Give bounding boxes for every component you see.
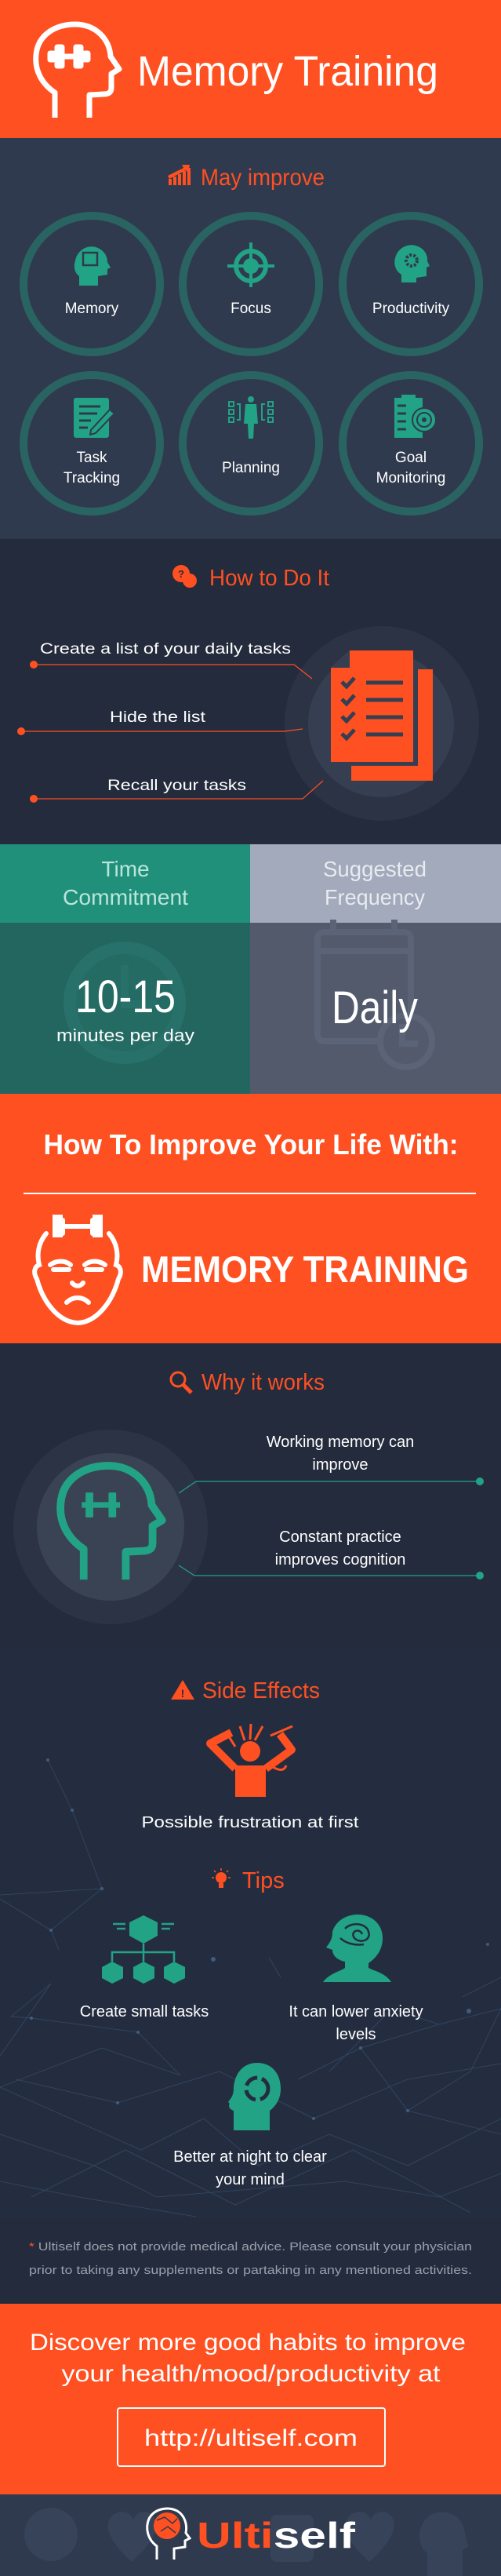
banner: how to improve your life: How To Improve Your Life With: [44,1128,458,1160]
heading: how to do it: How to Do It [209,566,329,591]
panel: how to do it [0,539,501,844]
step 3 [30,777,323,803]
circle: memory: Memory [65,301,119,317]
decorative network [0,1760,501,2217]
circle: task tracking: Tracking [64,470,120,486]
banner: how to improve your life: MEMORY TRAINING [141,1248,469,1290]
icon: strained face with dumbbell [34,1215,121,1323]
circle: goal monitoring: Goal [395,450,427,466]
panel: side effects and tips [0,1648,501,2218]
banner: how to improve your life [0,1094,501,1343]
circle: planning [183,375,319,512]
icon: teal head with dumbbell [13,1430,208,1624]
circle: goal monitoring: Monitoring [376,470,445,486]
point: working memory: Working memory can [267,1434,414,1451]
point: constant practice: improves cognition [275,1551,405,1569]
icon: head with dumbbell [36,24,119,118]
step 1 [30,640,312,679]
url button: http://ultiself.com [144,2425,358,2451]
panel: why it works [0,1343,501,1648]
tip: lower anxiety: levels [336,2026,376,2043]
icon: frustrated person [210,1724,292,1797]
title: Memory Training [137,48,438,95]
circle: focus: Focus [231,301,271,317]
circle: planning: Planning [222,460,280,476]
point: constant practice [179,1528,484,1579]
logo [147,2509,356,2560]
icon: faint calendar [318,920,432,1067]
heading: may improve: May improve [201,165,325,191]
heading: side effects: Side Effects [202,1678,320,1703]
panel: time commitment: Commitment [63,885,188,909]
panel: suggested frequency: Frequency [325,885,425,909]
step 2 [17,709,303,735]
url button [118,2408,385,2466]
circle: focus [183,216,319,352]
icon: faint clock [64,942,186,1064]
call to action: Discover more good habits to improve [30,2330,466,2356]
call to action: your health/mood/productivity at [61,2361,441,2387]
footer [0,2494,501,2576]
circle: productivity: Productivity [372,301,450,317]
step 3: Recall your tasks [107,777,246,794]
header band [0,0,501,138]
tip: better at night: your mind [216,2171,285,2188]
point: working memory: improve [312,1456,368,1474]
panel: time commitment: Time [101,857,150,881]
heading: why it works: Why it works [201,1370,325,1395]
heading: how to do it: ? [178,568,184,580]
heading: tips: Tips [242,1868,285,1893]
disclaimer: * Ultiself does not provide medical advice. Please consult your physician [29,2240,472,2254]
step 2: Hide the list [110,709,206,726]
panel: time commitment: minutes per day [56,1026,194,1045]
tip: lower anxiety [289,1915,423,2043]
tip: better at night [173,2063,327,2188]
tip: lower anxiety: It can lower anxiety [289,2003,423,2020]
faint background icons [24,2508,469,2576]
panel: suggested frequency [250,844,501,1094]
call to action [0,2304,501,2494]
heading: side effects: ! [181,1687,184,1700]
circle: memory [24,216,160,352]
tip: create small tasks: Create small tasks [80,2003,209,2020]
logo: Ulti self [197,2515,356,2556]
panel: time commitment [0,844,250,1094]
panel: suggested frequency: Suggested [323,857,427,881]
disclaimer: prior to taking any supplements or partaking in any mentioned activities. [29,2264,472,2277]
panel: may improve [0,138,501,539]
panel: time commitment: 10-15 [75,971,176,1022]
step 1: Create a list of your daily tasks [40,640,291,658]
heading: tips [212,1868,285,1893]
point: working memory [179,1434,484,1493]
icon: checklist documents [285,626,479,821]
disclaimer [0,2218,501,2304]
circle: task tracking [24,375,160,512]
panel: suggested frequency: Daily [332,982,418,1033]
circle: productivity [343,216,479,352]
point: constant practice: Constant practice [279,1528,401,1546]
tip: better at night: Better at night to clear [173,2148,327,2166]
tip: create small tasks [80,1915,209,2020]
circle: goal monitoring [343,375,479,512]
panel: side effects and tips: Possible frustration at first [141,1814,359,1831]
circle: task tracking: Task [76,450,107,466]
